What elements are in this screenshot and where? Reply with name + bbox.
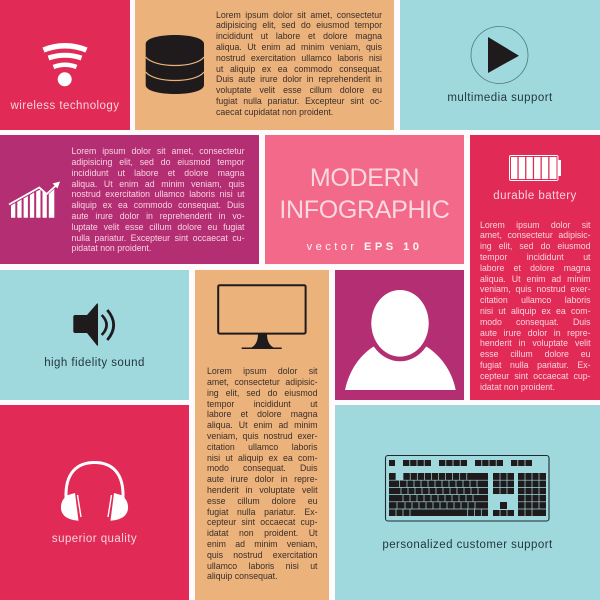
icon: wifi <box>42 43 88 86</box>
panel: personalized customer support <box>335 405 600 600</box>
text block: incididunt ut labore et dolore magna <box>72 168 244 178</box>
text block: tempor incididunt ut <box>207 399 318 409</box>
text block: pidatat non proident. <box>72 243 151 253</box>
text block: esse cillum dolore eu <box>480 349 590 359</box>
text block: tempor incididunt ut <box>480 252 590 262</box>
icon: keyboard <box>384 455 550 522</box>
label: superior quality: superior quality <box>52 533 137 545</box>
text block: luptate velit esse cillum dolore eu fugiat <box>72 222 244 232</box>
text block: nulla pariatur. Excepteur sint occaecat cu- <box>72 233 244 243</box>
text block: nostrud exercitation ullamco laboris nisi <box>216 53 382 63</box>
text block: aliqua. Ut enim ad minim <box>480 274 590 284</box>
text block: labore et dolore magna <box>207 409 318 419</box>
text block: modo consequat. Duis <box>207 463 318 473</box>
text block: modo consequat. Duis <box>480 317 590 327</box>
icon: person <box>345 290 456 390</box>
text block: aliqua. Ut enim ad minim veniam, quis <box>72 179 244 189</box>
text block: Duis aute irure dolor in reprehenderit in <box>216 74 382 84</box>
text block: aliqua. Ut enim ad minim <box>207 420 318 430</box>
label: wireless technology: wireless technology <box>11 100 119 112</box>
panel: durable battery <box>470 135 600 400</box>
text block: citation ullamco laboris <box>480 295 590 305</box>
heading: modern infographic: INFOGRAPHIC <box>279 196 450 224</box>
text block: aliqua. Ut enim ad minim veniam, quis <box>216 42 382 52</box>
text block: ing elit, sed do eiusmod <box>207 388 318 398</box>
text block: voluptate velit esse cillum dolore eu <box>216 85 382 95</box>
text block: henderit in voluptate velit <box>480 338 590 348</box>
panel: wireless technology <box>0 0 130 130</box>
text block: veniam, quis nostrud exer- <box>207 431 318 441</box>
text block: aute irure dolor in repre- <box>207 474 318 484</box>
icon: database <box>146 35 204 94</box>
text block: henderit in voluptate velit <box>207 485 318 495</box>
text block <box>207 366 318 581</box>
text block: Lorem ipsum dolor sit <box>480 220 590 230</box>
panel: superior quality <box>0 405 189 600</box>
label: durable battery: durable battery <box>493 190 577 202</box>
subheading: vector eps 10: vector EPS 10 <box>307 241 422 253</box>
icon: headphones <box>60 461 128 521</box>
text block: labore et dolore magna <box>480 263 590 273</box>
text block: adipisicing elit, sed do eiusmod tempor <box>216 20 382 30</box>
panel: title <box>265 135 464 264</box>
text block: cepteur sint occaecat cup- <box>207 517 318 527</box>
text block: amet, consectetur adipisic- <box>207 377 318 387</box>
text block: incididunt ut labore et dolore magna <box>216 31 382 41</box>
text block <box>480 220 590 392</box>
text block: ut aliquip ex ea commodo consequat. <box>216 64 382 74</box>
text block: ing elit, sed do eiusmod <box>480 241 590 251</box>
heading: modern infographic: MODERN <box>310 164 419 192</box>
text block: nisi ut aliquip ex ea com- <box>480 306 590 316</box>
icon: speaker <box>73 303 116 346</box>
icon: battery <box>509 155 561 181</box>
icon: rising bar chart <box>8 182 60 218</box>
text block: ullamco laboris nisi ut <box>207 561 318 571</box>
text block: fugiat nulla pariatur. Ex- <box>480 360 590 370</box>
panel: user profile <box>335 270 464 400</box>
text block: veniam, quis nostrud exer- <box>480 284 590 294</box>
text block: Lorem ipsum dolor sit amet, consectetur <box>72 146 244 156</box>
panel: multimedia support <box>400 0 600 130</box>
text block: quis nostrud exercitation <box>207 550 318 560</box>
text block: nostrud exercitation ullamco laboris nisi ut <box>72 189 244 199</box>
text block: amet, consectetur adipisic- <box>480 230 590 240</box>
text block: caecat cupidatat non proident. <box>216 107 333 117</box>
heading: modern infographic <box>279 164 450 224</box>
label: multimedia support: multimedia support <box>447 92 553 104</box>
text block: aute irure dolor in reprehenderit in vo- <box>72 211 244 221</box>
label: personalized customer support: personalized customer support <box>382 539 553 551</box>
text block <box>216 10 382 117</box>
text block: esse cillum dolore eu <box>207 496 318 506</box>
text block: cepteur sint occaecat cup- <box>480 371 590 381</box>
text block: aute irure dolor in repre- <box>480 328 590 338</box>
icon: play button <box>470 26 528 84</box>
label: high fidelity sound: high fidelity sound <box>44 357 145 369</box>
text block: aliquip consequat. <box>207 571 278 581</box>
text block: nisi ut aliquip ex ea com- <box>207 453 318 463</box>
text block: fugiat nulla pariatur. Ex- <box>207 507 318 517</box>
text block: enim ad minim veniam, <box>207 539 318 549</box>
text block: Lorem ipsum dolor sit amet, consectetur <box>216 10 382 20</box>
panel: database with text <box>135 0 394 130</box>
text block: idatat non proident. <box>480 382 555 392</box>
text block: fugiat nulla pariatur. Excepteur sint oc- <box>216 96 382 106</box>
text block: Lorem ipsum dolor sit <box>207 366 318 376</box>
panel: high fidelity sound <box>0 270 189 400</box>
panel: monitor with text <box>195 270 329 600</box>
panel: growth text <box>0 135 259 264</box>
text block <box>72 146 244 253</box>
icon: monitor <box>217 284 307 349</box>
text block: citation ullamco laboris <box>207 442 318 452</box>
text block: idatat non proident. Ut <box>207 528 318 538</box>
text block: aliquip ex ea commodo consequat. Duis <box>72 200 244 210</box>
text block: adipisicing elit, sed do eiusmod tempor <box>72 157 244 167</box>
